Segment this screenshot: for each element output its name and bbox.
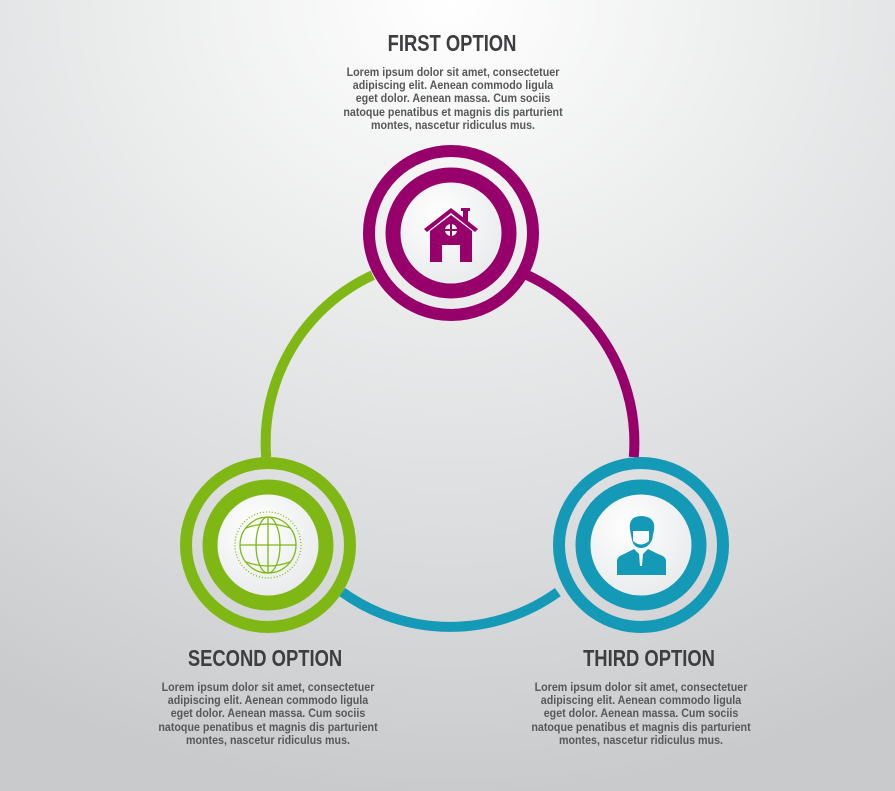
text: third option: eget dolor. Aenean massa. Cum sociis [544, 708, 738, 720]
text: third option: natoque penatibus et magnis dis parturient [531, 722, 751, 734]
text: first option: Lorem ipsum dolor sit amet, consectetuer [347, 67, 559, 79]
icon: globe [235, 512, 301, 578]
text: second option: adipiscing elit. Aenean commodo ligula [168, 695, 368, 707]
text: first option: montes, nascetur ridiculus mus. [371, 120, 535, 132]
icon: house [424, 208, 478, 262]
text: third option: adipiscing elit. Aenean commodo ligula [541, 695, 741, 707]
text: second option: Lorem ipsum dolor sit amet, consectetuer [162, 682, 374, 694]
text: third option: montes, nascetur ridiculus mus. [559, 735, 723, 747]
text: first option: adipiscing elit. Aenean commodo ligula [353, 80, 553, 92]
text: third option [531, 682, 751, 747]
text: third option: Lorem ipsum dolor sit amet, consectetuer [535, 682, 747, 694]
arc: teal [342, 592, 558, 627]
arc: purple [527, 275, 634, 457]
heading: third option: THIRD OPTION [583, 645, 715, 671]
node: third option [559, 463, 723, 627]
text: second option: natoque penatibus et magnis dis parturient [158, 722, 378, 734]
text: first option: eget dolor. Aenean massa. Cum sociis [356, 93, 550, 105]
text: second option [158, 682, 378, 747]
icon: person [617, 516, 666, 575]
text: second option: montes, nascetur ridiculus mus. [186, 735, 350, 747]
text: first option [343, 67, 563, 132]
node: first option [369, 151, 533, 315]
heading: second option: SECOND OPTION [188, 645, 342, 671]
text: first option: natoque penatibus et magnis dis parturient [343, 107, 563, 119]
arc: green [266, 275, 373, 457]
node: second option [186, 463, 350, 627]
text: second option: eget dolor. Aenean massa. Cum sociis [171, 708, 365, 720]
heading: first option: FIRST OPTION [388, 30, 516, 56]
